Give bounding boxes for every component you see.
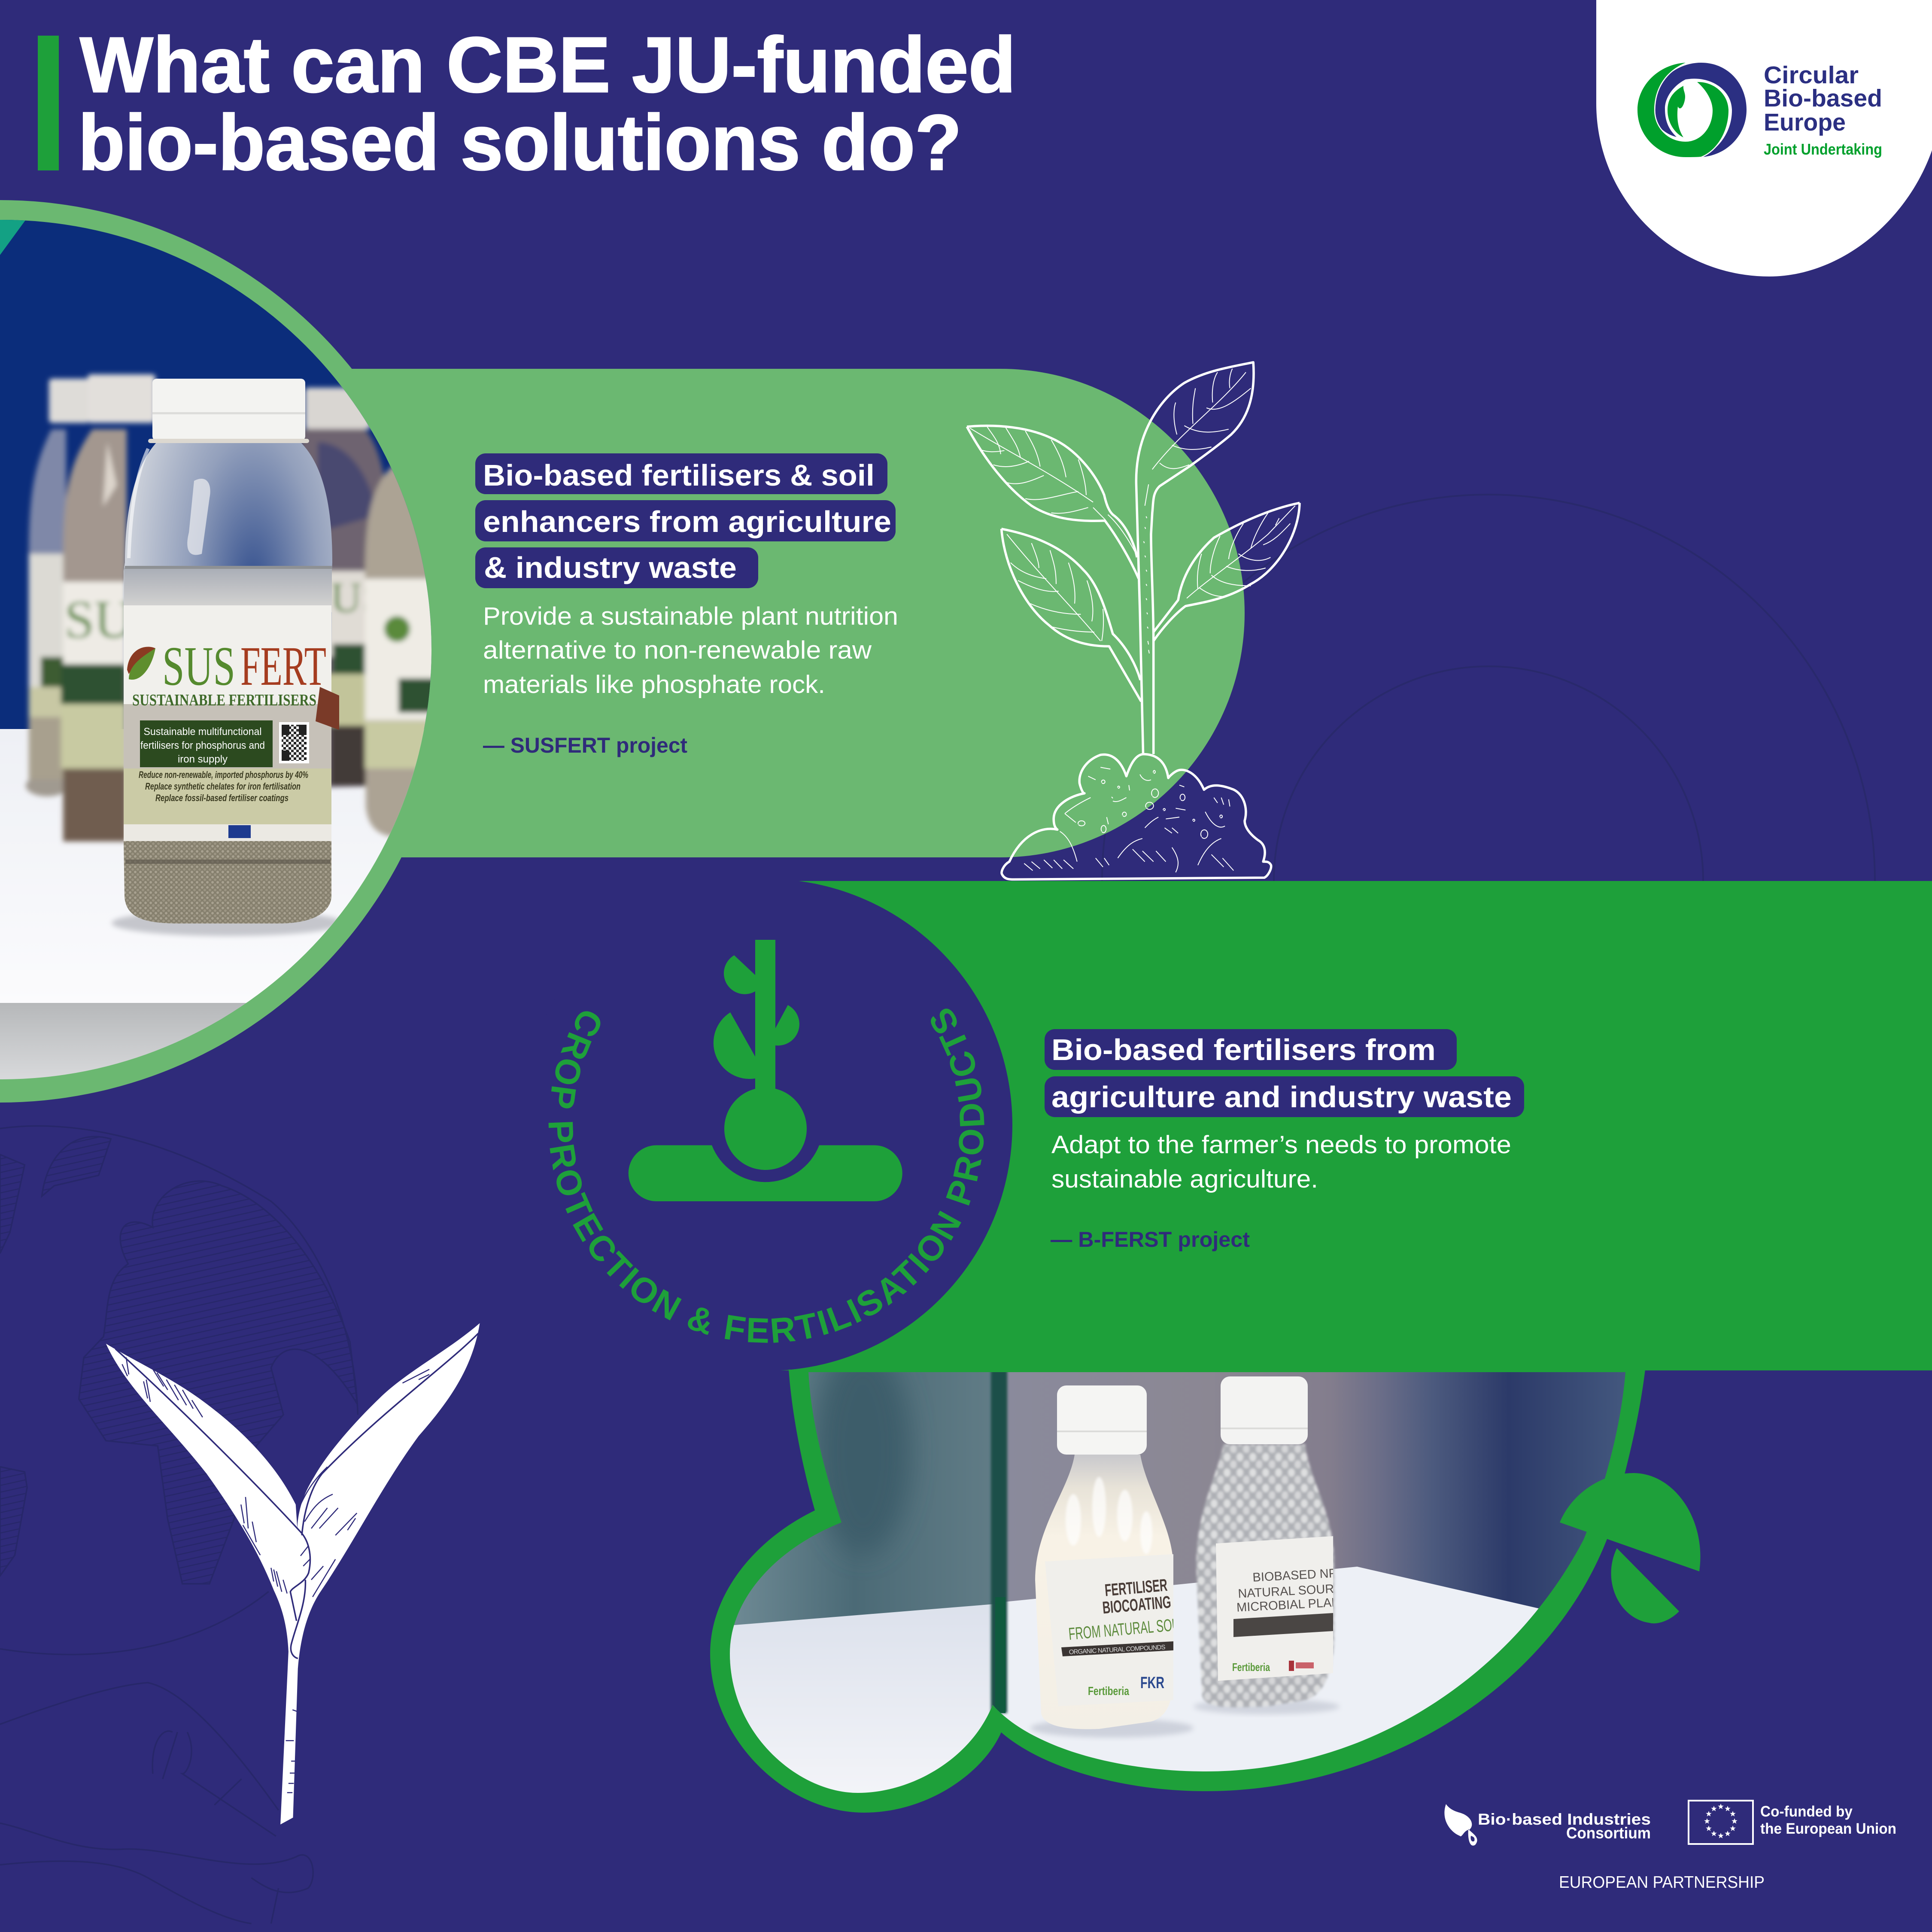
panel: SUSFERT text block: alternative to non-renewable raw	[483, 636, 872, 664]
logo wordmark	[1764, 61, 1882, 158]
title	[38, 21, 1016, 186]
logo wordmark: Joint Undertaking	[1764, 140, 1882, 158]
decorative concentric arcs	[1101, 494, 1876, 881]
blurred back bottles: US	[331, 574, 386, 621]
right bottle	[1194, 1376, 1352, 1714]
main bottle: iron supply	[178, 753, 228, 765]
panel: SUSFERT text block: & industry waste	[484, 551, 737, 584]
icon: sprout and seed	[629, 940, 902, 1201]
badge: crop protection and fertilisation	[520, 879, 1012, 1371]
curved label	[549, 1000, 984, 1343]
panel: SUSFERT text block: materials like phosphate rock.	[483, 671, 825, 699]
body text: Provide a sustainable plant nutrition	[483, 602, 898, 630]
left bottle: FROM NATURAL SOU	[1068, 1615, 1181, 1643]
logo wordmark: Circular	[1764, 61, 1859, 89]
main bottle: Sustainable multifunctional	[143, 726, 262, 738]
attribution: — B-FERST project	[1051, 1227, 1250, 1252]
photo: B-FERST fertiliser bottles	[708, 1348, 1636, 1803]
label: European Partnership: EUROPEAN PARTNERSHIP	[1559, 1873, 1765, 1892]
main bottle: fertilisers for phosphorus and	[140, 740, 265, 751]
panel: green B-FERST banner	[766, 881, 1932, 1370]
attribution: — SUSFERT project	[483, 733, 687, 757]
main bottle: FERT	[240, 635, 326, 697]
panel: B-FERST text block	[1045, 1029, 1524, 1252]
heading text: Bio-based fertilisers from	[1051, 1033, 1436, 1066]
left bottle: FKR	[1140, 1674, 1164, 1692]
panel: SUSFERT text block	[475, 453, 898, 757]
logo: Bio-based Industries Consortium: Consortium	[1566, 1824, 1651, 1842]
main bottle: SUSTAINABLE FERTILISERS	[132, 691, 316, 709]
photo ring: B-FERST	[710, 1370, 1645, 1813]
main bottle: SUS	[162, 635, 235, 697]
logo mark	[1637, 63, 1747, 157]
illustration: plant outline	[967, 362, 1300, 879]
logo: co-funded by the European Union: Co-funded by	[1760, 1803, 1853, 1820]
logo: Circular Bio-based Europe panel	[1596, 0, 1932, 276]
logo: co-funded by the European Union	[1689, 1801, 1896, 1844]
globe and hand watermark	[0, 1126, 358, 1923]
left bottle: FERTILISER	[1104, 1576, 1168, 1600]
right bottle: MICROBIAL PLANT	[1236, 1595, 1349, 1615]
icon: BIC leaf	[1444, 1804, 1477, 1846]
main bottle: Replace synthetic chelates for iron fertilisation	[145, 781, 301, 792]
badge disc	[520, 879, 1012, 1371]
panel: SUSFERT text block: enhancers from agriculture	[483, 505, 891, 538]
logo: co-funded by the European Union: the European Union	[1760, 1820, 1896, 1837]
left bottle: ORGANIC NATURAL COMPOUNDS	[1069, 1643, 1166, 1656]
logo wordmark: Europe	[1764, 109, 1846, 136]
photo ring: SUSFERT	[0, 200, 451, 1103]
blurred back bottles: SUS	[64, 590, 163, 650]
heading pills	[475, 453, 887, 494]
heading text: Bio-based fertilisers & soil	[483, 459, 875, 492]
main bottle: Replace fossil-based fertiliser coatings	[155, 793, 289, 803]
body text: Adapt to the farmer’s needs to promote	[1051, 1131, 1511, 1159]
right bottle: Fertiberia	[1232, 1661, 1270, 1674]
icon: green leaves on photo frame	[1560, 1473, 1700, 1623]
logo: Bio-based Industries Consortium	[1444, 1804, 1651, 1846]
panel: B-FERST text block: sustainable agriculture.	[1051, 1165, 1318, 1193]
bottle logo	[127, 647, 155, 674]
white logo backing	[1596, 0, 1932, 276]
logo: Bio-based Industries Consortium: Bio·based Industries	[1478, 1810, 1651, 1828]
illustration: white seedling	[106, 1323, 480, 1824]
left bottle: Fertiberia	[1088, 1684, 1129, 1698]
left bottle	[1030, 1385, 1194, 1738]
icon: EU flag	[1689, 1801, 1753, 1844]
badge: crop protection and fertilisation: CROP PROTECTION & FERTILISATION PRODUCTS	[541, 999, 992, 1351]
heading pills	[1045, 1029, 1457, 1070]
left bottle: BIOCOATING	[1102, 1593, 1172, 1617]
photo: SUSFERT fertiliser bottles	[0, 220, 431, 1079]
main bottle: Reduce non-renewable, imported phosphorus by 40%	[139, 769, 308, 780]
bottle glass	[124, 442, 332, 923]
title text: What can CBE JU-funded	[80, 21, 1016, 109]
bottle label	[124, 605, 331, 704]
pellets	[124, 841, 331, 923]
QR code	[279, 722, 309, 763]
panel: B-FERST text block: agriculture and industry waste	[1051, 1080, 1512, 1114]
right bottle: BIOBASED NPK	[1252, 1566, 1346, 1585]
logo wordmark: Bio-based	[1764, 85, 1882, 112]
title: bio-based solutions do?	[78, 98, 962, 186]
bottle cap	[152, 379, 305, 440]
title accent bar	[38, 36, 59, 170]
blurred back bottles	[26, 374, 438, 841]
panel: light green SUSFERT banner	[301, 369, 1245, 857]
main bottle	[112, 379, 343, 936]
right bottle: NATURAL SOURCE	[1238, 1581, 1352, 1601]
